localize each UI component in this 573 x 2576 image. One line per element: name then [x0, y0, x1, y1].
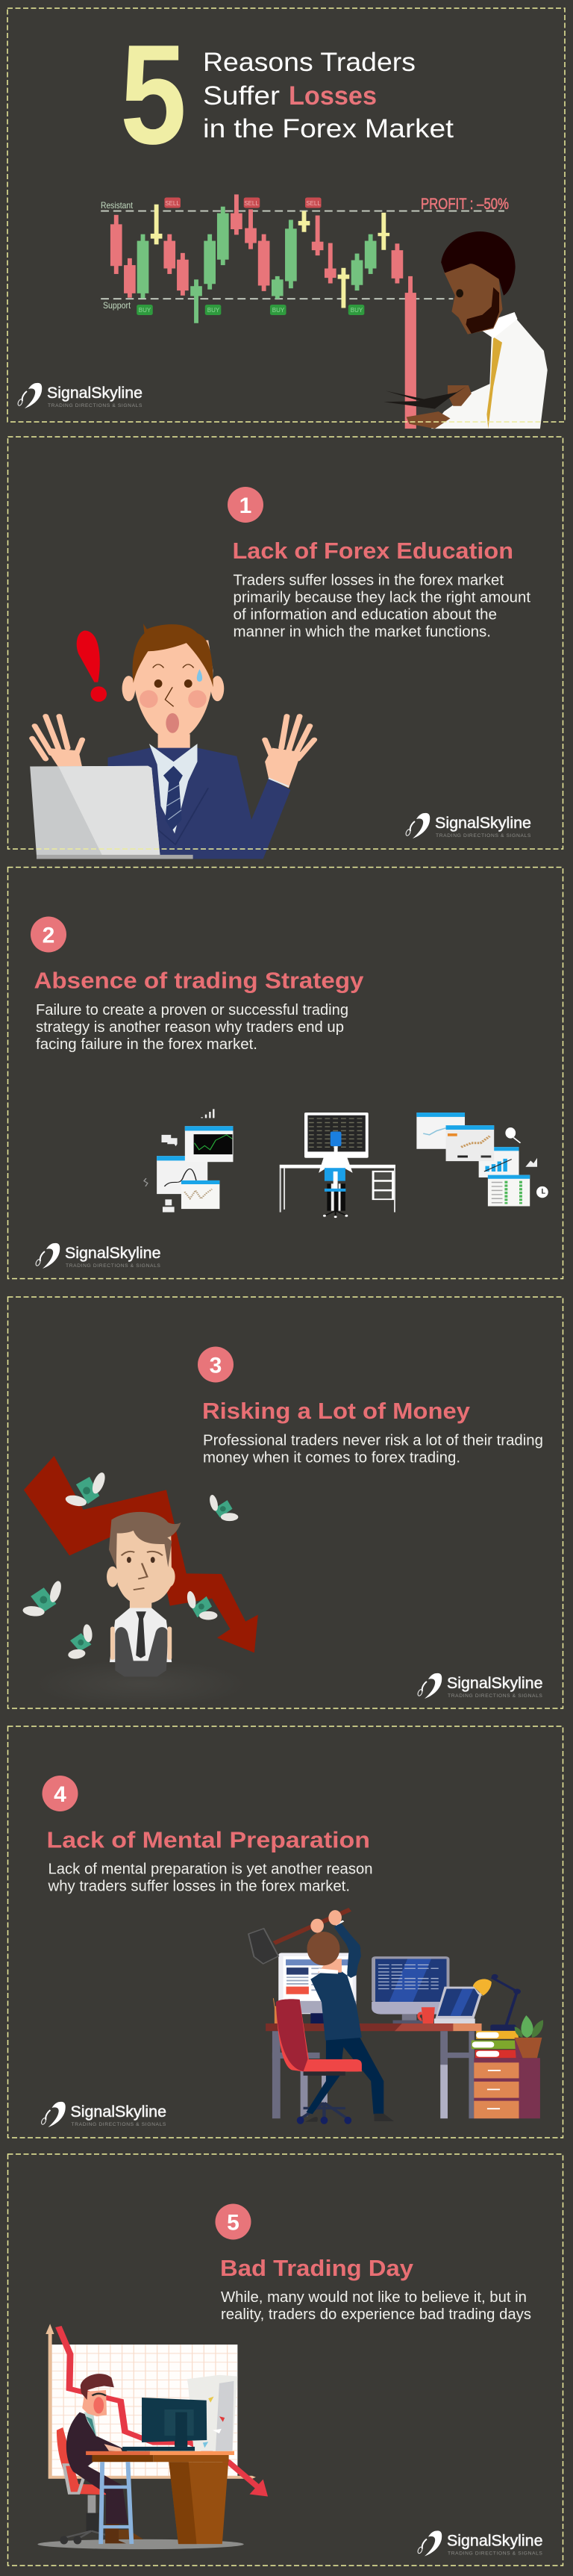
body text: manner in which the market functions.	[233, 624, 491, 641]
sell tags: SELL	[165, 200, 180, 207]
body text	[221, 2289, 531, 2323]
logo	[17, 383, 143, 408]
heading: Lack of Mental Preparation	[46, 1826, 370, 1853]
monitor and seated trader	[280, 1113, 395, 1218]
logo	[40, 2102, 166, 2127]
body text: facing failure in the forex market.	[36, 1036, 257, 1053]
heading: Bad Trading Day	[220, 2255, 414, 2281]
body text	[36, 1002, 348, 1053]
logo wordmark: SignalSkyline	[447, 1675, 543, 1692]
angry trader with hammer	[248, 1909, 394, 2122]
body text: Lack of mental preparation is yet another reason	[48, 1861, 373, 1877]
profit label: PROFIT : –50%	[421, 196, 509, 213]
computer monitor	[122, 2398, 207, 2451]
logo wordmark: SignalSkyline	[47, 385, 143, 402]
logo mark	[35, 1243, 60, 1269]
illustration: trader cutting candle with scissors	[383, 231, 548, 429]
buy tags: BUY	[207, 307, 220, 314]
illustration: trader at desk with chart windows	[144, 1109, 548, 1218]
logo tagline: TRADING DIRECTIONS & SIGNALS	[72, 2122, 166, 2127]
title line 3: in the Forex Market	[203, 114, 454, 143]
panel: reason 1	[7, 437, 563, 859]
body text	[47, 1861, 372, 1895]
body text: why traders suffer losses in the forex market.	[47, 1879, 350, 1895]
heading: Risking a Lot of Money	[202, 1398, 471, 1424]
monitor 1	[273, 1953, 357, 2023]
number badge 2	[31, 917, 66, 953]
panel: reason 4	[7, 1726, 563, 2138]
title	[120, 16, 454, 174]
left chart windows	[144, 1109, 233, 1212]
logo mark	[417, 1673, 442, 1699]
blue stool frame	[101, 2462, 131, 2544]
desk	[266, 2023, 482, 2118]
flying money: note 4	[186, 1590, 217, 1620]
body text	[203, 1432, 543, 1466]
logo wordmark: SignalSkyline	[435, 815, 531, 832]
support and resistance labels: Resistant	[101, 200, 134, 211]
heading: Absence of trading Strategy	[34, 968, 364, 993]
body text: Traders suffer losses in the forex market	[233, 572, 504, 588]
buy tags: BUY	[272, 307, 285, 314]
body text: strategy is another reason why traders end up	[36, 1019, 344, 1036]
icon: laptop	[30, 766, 193, 859]
chair back and base	[276, 1999, 362, 2124]
desk	[86, 2451, 234, 2544]
number badge 5: 5	[227, 2210, 239, 2236]
logo wordmark: SignalSkyline	[65, 1245, 161, 1262]
candlestick chart: Support	[103, 300, 131, 311]
big number 5: 5	[120, 16, 187, 174]
logo tagline: TRADING DIRECTIONS & SIGNALS	[48, 403, 143, 408]
buy tags: BUY	[139, 307, 151, 314]
laptop	[434, 1987, 484, 2023]
logo	[417, 2530, 543, 2557]
panel: reason 3	[7, 1297, 563, 1708]
body text: Professional traders never risk a lot of their trading	[203, 1432, 543, 1449]
body text: reality, traders do experience bad trading days	[221, 2306, 531, 2323]
flying money: note 3	[22, 1580, 63, 1617]
desk lamp	[473, 1974, 521, 2031]
drawers, books and plant	[472, 2015, 543, 2118]
number badge 2: 2	[43, 923, 54, 948]
flying money: note 1	[63, 1472, 107, 1508]
panel: header	[7, 8, 565, 429]
panel: reason 2	[7, 868, 563, 1278]
title line 2: Suffer	[203, 81, 280, 111]
logo tagline: TRADING DIRECTIONS & SIGNALS	[66, 1263, 161, 1269]
logo mark	[40, 2102, 66, 2127]
body text: Failure to create a proven or successful trading	[36, 1002, 348, 1018]
buy tags: BUY	[351, 307, 363, 314]
illustration: tired trader at desk with falling chart	[37, 2324, 268, 2549]
mug	[417, 2007, 435, 2023]
heading: Lack of Forex Education	[233, 538, 513, 564]
sell tags	[165, 200, 321, 207]
number badge 3	[198, 1347, 234, 1383]
flying money: note 2	[208, 1494, 238, 1521]
arrow: red downtrend	[24, 1456, 258, 1652]
logo wordmark: SignalSkyline	[70, 2103, 166, 2121]
title line 1: Reasons Traders	[203, 48, 416, 77]
body text: primarily because they lack the right amount	[233, 590, 530, 606]
title word: Losses: Losses	[289, 81, 377, 111]
logo	[405, 813, 531, 839]
illustration: surprised trader with laptop	[30, 623, 314, 859]
falling chart board	[46, 2324, 268, 2496]
sell tags: SELL	[306, 200, 321, 207]
logo mark	[17, 383, 42, 408]
logo tagline: TRADING DIRECTIONS & SIGNALS	[448, 2551, 543, 2557]
logo mark	[417, 2530, 442, 2557]
illustration: falling red arrow and worried trader	[22, 1456, 258, 1708]
tired trader	[57, 2374, 143, 2544]
monitor 2	[372, 1956, 449, 2023]
panel: reason 5	[7, 2154, 563, 2566]
paper stack	[187, 2375, 237, 2451]
body text: money when it comes to forex trading.	[203, 1450, 460, 1466]
logo wordmark: SignalSkyline	[447, 2533, 543, 2549]
logo	[35, 1243, 161, 1269]
number badge 1: 1	[239, 494, 251, 518]
logo mark	[405, 813, 430, 839]
icon: red exclamation mark	[77, 630, 107, 702]
body text: While, many would not like to believe it, but in	[221, 2289, 527, 2306]
number badge 4: 4	[54, 1782, 66, 1807]
number badge 5	[215, 2204, 251, 2240]
buy tags	[139, 307, 363, 314]
number badge 1	[228, 487, 263, 523]
worried trader	[107, 1512, 181, 1676]
flying money: note 5	[66, 1624, 93, 1660]
right chart windows	[416, 1113, 548, 1206]
illustration: angry trader smashing computer	[248, 1909, 543, 2124]
logo tagline: TRADING DIRECTIONS & SIGNALS	[436, 833, 531, 839]
sell tags: SELL	[244, 200, 259, 207]
logo tagline: TRADING DIRECTIONS & SIGNALS	[448, 1693, 543, 1699]
candlestick chart	[101, 194, 509, 429]
number badge 4	[42, 1776, 78, 1811]
chair seat	[304, 2059, 362, 2076]
logo	[417, 1673, 543, 1699]
body text	[233, 572, 530, 641]
number badge 3: 3	[210, 1353, 222, 1378]
body text: of information and education about the	[233, 606, 497, 623]
